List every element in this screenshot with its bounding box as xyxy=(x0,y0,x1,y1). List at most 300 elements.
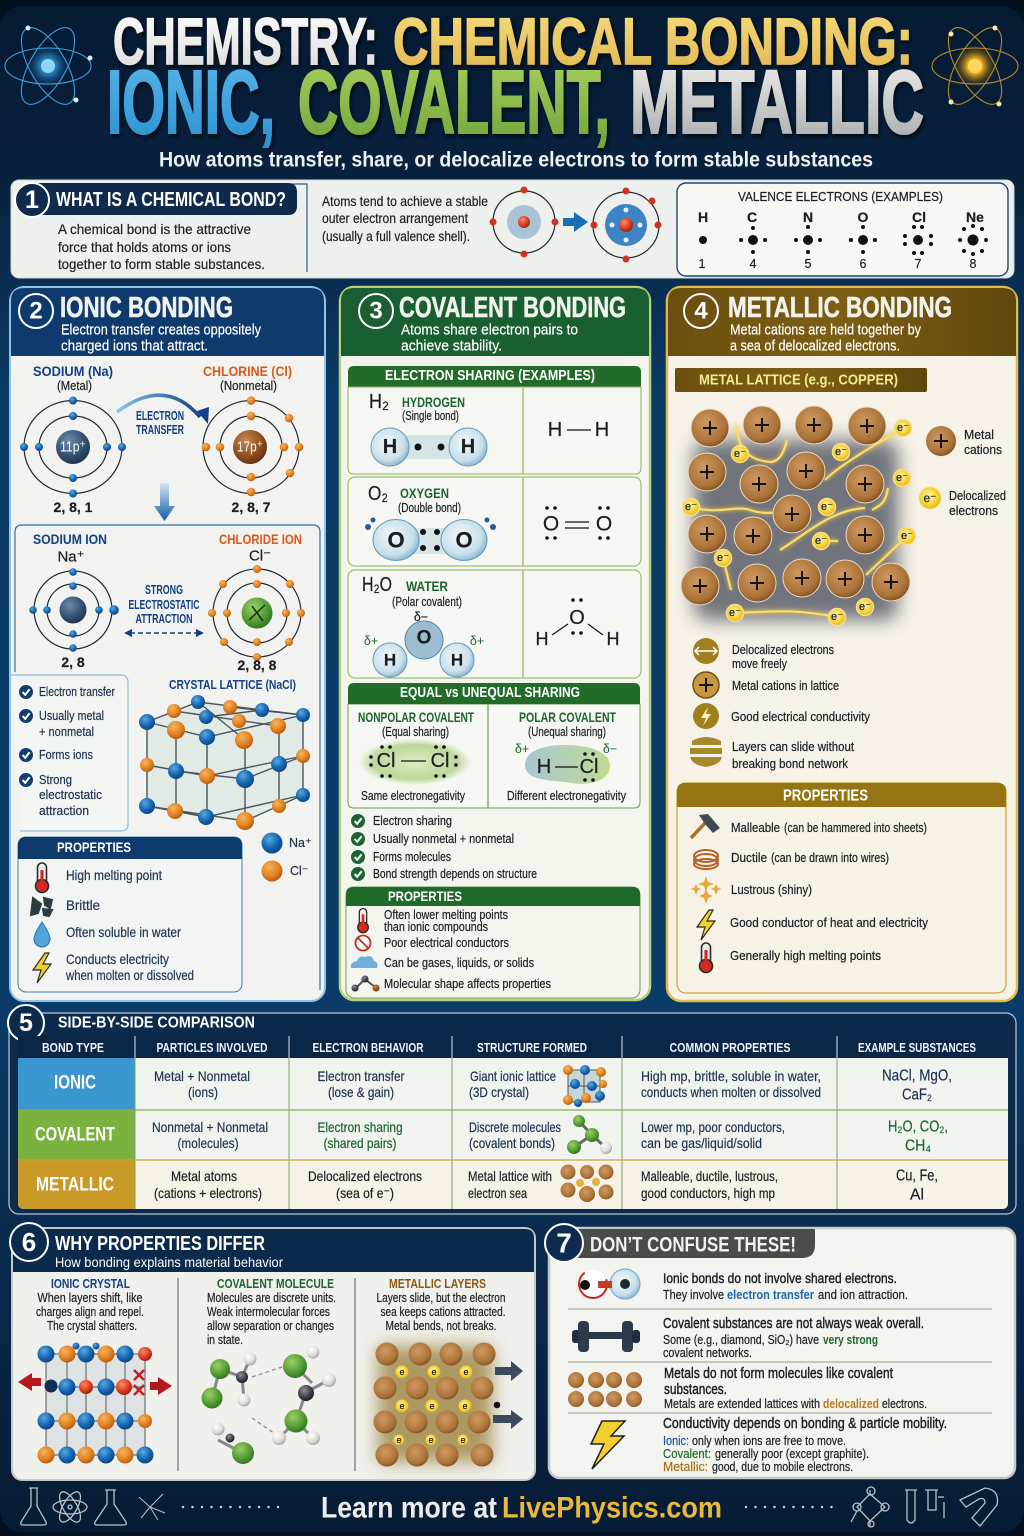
polar covalent: Different electronegativity xyxy=(507,789,627,803)
molecule: H2O: H xyxy=(384,650,396,670)
polar covalent: (Unequal sharing) xyxy=(528,725,606,739)
icon: conductivity xyxy=(693,703,719,729)
chlorine atom xyxy=(202,363,303,515)
item: metals: electrons. xyxy=(882,1397,927,1411)
table row: metallic: (sea of e⁻) xyxy=(336,1185,394,1201)
properties: covalent: Molecular shape affects properties xyxy=(384,977,551,991)
item: conductivity: Ionic: xyxy=(663,1434,689,1448)
column: metallic layers: METALLIC LAYERS xyxy=(389,1277,486,1291)
table header: STRUCTURE FORMED xyxy=(477,1041,587,1055)
header: why properties differ: How bonding explains material behavior xyxy=(55,1254,283,1270)
column: ionic crystal: When layers shift, like xyxy=(38,1291,143,1305)
checklist: ionic: Forms ions xyxy=(39,748,93,762)
item: covalent strength xyxy=(572,1316,924,1360)
item: conductivity: Metallic: xyxy=(663,1460,708,1474)
legend: metal cations xyxy=(926,426,1002,457)
polar covalent: H xyxy=(537,756,551,778)
row: water: WATER xyxy=(406,578,448,594)
checklist: ionic: Electron transfer xyxy=(39,685,115,699)
icon: wire coil xyxy=(694,850,718,869)
panel 6: why properties differ xyxy=(10,1223,535,1480)
legend: Na+ and Cl-: Cl⁻ xyxy=(290,864,308,878)
structure: O=O: O xyxy=(543,512,559,536)
chart: metal layers xyxy=(374,1342,523,1466)
table row: covalent: Nonmetal + Nonmetal xyxy=(152,1119,268,1135)
legend: Na+ and Cl-: Na⁺ xyxy=(289,836,312,850)
table header: PARTICLES INVOLVED xyxy=(156,1041,268,1055)
properties: ionic: Brittle xyxy=(66,897,100,913)
chart: crystal lattice xyxy=(139,678,310,830)
table row: metallic: Cu, Fe, xyxy=(896,1168,938,1184)
table header: BOND TYPE xyxy=(42,1041,104,1055)
list: metallic characteristics: breaking bond network xyxy=(732,757,849,771)
row: oxygen xyxy=(348,477,641,566)
text: stable arrangement: outer electron arrangement xyxy=(322,210,468,226)
molecule: H2 xyxy=(371,428,487,466)
icon: sparkles xyxy=(690,876,722,904)
properties: metallic xyxy=(677,783,1006,993)
column: covalent molecule: allow separation or changes xyxy=(207,1319,334,1333)
nonpolar covalent: (Equal sharing) xyxy=(382,725,449,739)
sodium ion: 2, 8 xyxy=(61,654,85,670)
icon: cation xyxy=(693,672,719,698)
table row: ionic: High mp, brittle, soluble in water, xyxy=(641,1068,821,1084)
checklist: ionic: + nonmetal xyxy=(39,725,94,739)
icon: atom before xyxy=(490,186,558,258)
panel: valence electrons: 5 xyxy=(805,257,812,271)
item: conductivity: only when ions are free to move. xyxy=(692,1434,846,1448)
polar covalent: δ− xyxy=(603,742,617,756)
panel: valence electrons: 4 xyxy=(750,257,757,271)
table row: metallic: good conductors, high mp xyxy=(641,1185,775,1201)
molecule: O2: O xyxy=(455,528,473,552)
header: ionic bonding: Electron transfer creates oppositely xyxy=(61,322,261,338)
properties: ionic: Conducts electricity xyxy=(66,951,169,967)
header: metallic bonding: Metal cations are held together by xyxy=(730,322,921,338)
icon: metal spheres xyxy=(568,1372,642,1407)
table row: ionic: NaCl, MgO, xyxy=(882,1068,952,1084)
text: bond definition: together to form stable substances. xyxy=(58,256,265,272)
column: ionic crystal: charges align and repel. xyxy=(36,1305,144,1319)
panel 1: what is a chemical bond xyxy=(11,180,1014,278)
header: covalent bonding: COVALENT BONDING xyxy=(399,292,626,324)
legend: metal cations: cations xyxy=(964,443,1002,457)
molecule: O2: O xyxy=(387,528,405,552)
heading: what is a chemical bond: WHAT IS A CHEMICAL BOND? xyxy=(56,189,286,211)
icon: thermometer xyxy=(700,943,712,972)
item: metals: Metals do not form molecules like covalent xyxy=(664,1366,893,1382)
title: COVALENT, xyxy=(298,53,610,153)
item: conductivity: generally poor (except graphite). xyxy=(715,1447,869,1461)
table row: metallic: (cations + electrons) xyxy=(154,1185,262,1201)
heading: don't confuse these xyxy=(545,1224,815,1262)
icon: hammer xyxy=(691,814,720,838)
chart: metal layers: e xyxy=(399,1401,405,1411)
equal vs unequal sharing xyxy=(348,683,640,808)
arrow: down xyxy=(154,483,175,521)
structure: H-H xyxy=(548,419,609,441)
text: bond definition: A chemical bond is the attractive xyxy=(58,221,251,237)
table row: covalent: (covalent bonds) xyxy=(469,1135,555,1151)
checklist: covalent: Electron sharing xyxy=(373,814,452,828)
chlorine atom: CHLORINE (Cl) xyxy=(203,363,292,379)
electrostatic attraction arrow: STRONG xyxy=(145,583,183,597)
chart: metal lattice xyxy=(681,406,916,626)
row: water: (Polar covalent) xyxy=(392,595,462,609)
properties: metallic: Generally high melting points xyxy=(730,949,881,963)
table row: covalent: (shared pairs) xyxy=(324,1135,396,1151)
legend: delocalized electrons: Delocalized xyxy=(949,489,1006,503)
molecule: H2: H xyxy=(383,436,397,458)
sodium ion xyxy=(29,531,119,670)
list: metallic characteristics: Delocalized electrons xyxy=(732,643,834,657)
header: ionic bonding: charged ions that attract. xyxy=(61,338,208,354)
table header: COMMON PROPERTIES xyxy=(670,1041,790,1055)
chart: metal lattice: e⁻ xyxy=(901,530,913,542)
text: bond definition: force that holds atoms or ions xyxy=(58,239,231,255)
properties: ionic xyxy=(18,837,242,992)
nonpolar covalent: NONPOLAR COVALENT xyxy=(358,709,474,725)
electrostatic attraction arrow: ELECTROSTATIC xyxy=(128,598,200,612)
chart: metal lattice: e⁻ xyxy=(729,607,741,619)
list: metallic characteristics: Layers can slide without xyxy=(732,740,854,754)
properties: metallic: Good conductor of heat and electricity xyxy=(730,916,929,930)
row: water: H₂O xyxy=(362,574,392,596)
column: metallic layers: sea keeps cations attracted. xyxy=(380,1305,506,1319)
list: metallic characteristics xyxy=(690,638,871,771)
structure: H2O xyxy=(536,598,620,649)
panel: valence electrons: H xyxy=(698,209,708,225)
item: conductivity: Conductivity depends on bonding & particle mobility. xyxy=(663,1416,947,1432)
chloride ion xyxy=(208,531,305,673)
header: covalent bonding xyxy=(341,288,649,356)
text: stable arrangement: (usually a full valence shell). xyxy=(322,228,470,244)
properties: ionic: PROPERTIES xyxy=(57,839,131,855)
checklist: ionic: electrostatic xyxy=(39,788,102,802)
chloride ion: CHLORIDE ION xyxy=(219,531,302,547)
panel 4: metallic bonding xyxy=(667,287,1017,1001)
panel: valence electrons: N xyxy=(803,209,813,225)
table row: ionic: conducts when molten or dissolved xyxy=(641,1084,821,1100)
chart: metal layers: e xyxy=(429,1401,435,1411)
polar covalent: Cl xyxy=(580,756,598,778)
column: covalent molecule: Weak intermolecular forces xyxy=(207,1305,330,1319)
item: ionic bonds: Ionic bonds do not involve shared electrons. xyxy=(663,1270,897,1286)
row: oxygen: (Double bond) xyxy=(398,501,461,515)
header: ionic bonding xyxy=(11,288,324,356)
item: covalent strength: Some (e.g., diamond, SiO₂) have xyxy=(663,1333,819,1347)
column: covalent molecule: COVALENT MOLECULE xyxy=(217,1277,334,1291)
table row: metallic: Metal atoms xyxy=(171,1168,237,1184)
structure: H2O: O xyxy=(569,607,585,629)
icon: atom after xyxy=(590,188,662,262)
structure: H-H: H xyxy=(548,419,562,441)
column: metallic layers: Layers slide, but the electron xyxy=(376,1291,506,1305)
chlorine atom: (Nonmetal) xyxy=(220,379,277,393)
heading: don't confuse these: DON’T CONFUSE THESE! xyxy=(590,1234,796,1256)
header: covalent bonding: 3 xyxy=(369,298,383,324)
legend: delocalized electrons: e⁻ xyxy=(923,491,937,505)
item: conductivity: good, due to mobile electrons. xyxy=(712,1460,853,1474)
molecule: H2O: δ+ xyxy=(470,634,484,648)
chart: metal lattice: e⁻ xyxy=(821,501,833,513)
electrostatic attraction arrow: ATTRACTION xyxy=(136,612,192,626)
icon: thermometer xyxy=(358,909,368,933)
list: metallic characteristics: move freely xyxy=(732,657,788,671)
item: covalent strength: covalent networks. xyxy=(663,1346,752,1360)
item: conductivity xyxy=(591,1416,947,1474)
table row: covalent: COVALENT xyxy=(35,1124,115,1146)
table header: EXAMPLE SUBSTANCES xyxy=(858,1041,976,1055)
properties: covalent: Often lower melting points xyxy=(384,908,508,922)
panel: valence electrons: 7 xyxy=(915,257,922,271)
header: covalent bonding: achieve stability. xyxy=(401,338,502,354)
nonpolar covalent xyxy=(358,709,474,803)
chlorine atom: 17p⁺ xyxy=(237,438,263,456)
item: metals xyxy=(568,1366,927,1411)
item: covalent strength: very strong xyxy=(823,1333,878,1347)
column: ionic crystal: The crystal shatters. xyxy=(47,1319,137,1333)
arrow: electron transfer: ELECTRON xyxy=(136,409,184,423)
properties: ionic: High melting point xyxy=(66,867,162,883)
footer: learn more xyxy=(321,1492,722,1524)
table row: ionic xyxy=(18,1058,1008,1110)
icon: layers xyxy=(690,737,722,767)
ion result box xyxy=(15,525,320,990)
title: IONIC, xyxy=(107,53,275,153)
sodium atom xyxy=(20,363,126,515)
icon: mini molecule xyxy=(567,1115,612,1154)
properties: metallic: Lustrous (shiny) xyxy=(731,883,812,897)
polar covalent: δ+ xyxy=(515,742,529,756)
chart: metal layers: e xyxy=(463,1367,469,1377)
sodium atom: 11p⁺ xyxy=(60,438,86,456)
header: ionic bonding: 2 xyxy=(29,298,43,324)
properties: metallic: (can be hammered into sheets) xyxy=(784,821,927,835)
column: covalent molecule xyxy=(202,1277,336,1464)
checklist: covalent: Usually nonmetal + nonmetal xyxy=(373,832,514,846)
table row: covalent: H₂O, CO₂, xyxy=(888,1118,948,1136)
metal lattice header: METAL LATTICE (e.g., COPPER) xyxy=(699,372,898,388)
panel 7: don't confuse these xyxy=(545,1224,1015,1478)
header: metallic bonding xyxy=(668,288,1016,356)
molecule: H2O: δ− xyxy=(414,610,428,624)
list: metallic characteristics: Good electrical conductivity xyxy=(731,710,871,724)
item: metals: Metals are extended lattices with xyxy=(664,1397,820,1411)
chart: metal lattice: e⁻ xyxy=(896,472,908,484)
text: bond definition xyxy=(58,221,265,272)
sodium ion: Na⁺ xyxy=(57,548,85,566)
icon: no conductivity xyxy=(356,936,370,950)
panel: valence electrons: 1 xyxy=(699,257,706,271)
properties: ionic: Often soluble in water xyxy=(66,924,181,940)
text: stable arrangement xyxy=(322,193,488,244)
row: water xyxy=(348,570,641,678)
chloride ion: Cl⁻ xyxy=(249,548,271,564)
chart: metal lattice: e⁻ xyxy=(717,552,729,564)
panel: valence electrons: 8 xyxy=(970,257,977,271)
chart: metal lattice: e⁻ xyxy=(831,611,843,623)
table row: covalent: Lower mp, poor conductors, xyxy=(641,1119,785,1135)
row: hydrogen: H₂ xyxy=(369,391,389,413)
heading: side-by-side comparison: 5 xyxy=(19,1009,33,1037)
checklist: ionic: attraction xyxy=(39,804,89,818)
panel: valence electrons: Ne xyxy=(966,209,984,225)
properties: covalent xyxy=(346,887,640,998)
column: metallic layers xyxy=(374,1277,523,1466)
table header xyxy=(18,1036,1008,1058)
legend: metal cations: Metal xyxy=(964,428,994,442)
column: metallic layers: Metal bends, not breaks. xyxy=(386,1319,496,1333)
nonpolar covalent: Cl xyxy=(377,750,395,772)
properties: metallic: Malleable xyxy=(731,821,780,835)
table header: ELECTRON BEHAVIOR xyxy=(312,1041,424,1055)
electron sharing header: ELECTRON SHARING (EXAMPLES) xyxy=(385,368,595,384)
chart: metal layers: e xyxy=(462,1401,468,1411)
heading: what is a chemical bond xyxy=(15,183,297,217)
checklist: ionic xyxy=(11,675,128,831)
icon: brittle shards xyxy=(31,898,52,916)
molecule: H2: H xyxy=(461,436,475,458)
title: CHEMISTRY: xyxy=(113,4,378,78)
chart: metal lattice: e⁻ xyxy=(835,446,847,458)
item: metals: delocalized xyxy=(823,1397,879,1411)
header: why properties differ: 6 xyxy=(22,1227,36,1257)
icon: moving electrons xyxy=(693,638,719,664)
polar covalent: POLAR COVALENT xyxy=(519,709,616,725)
sodium atom: (Metal) xyxy=(57,379,92,393)
list: metallic characteristics: Metal cations in lattice xyxy=(732,679,839,693)
table row: metallic: Malleable, ductile, lustrous, xyxy=(641,1168,778,1184)
panel 2: ionic bonding xyxy=(10,287,325,1001)
table row: covalent: (molecules) xyxy=(178,1135,238,1151)
column: ionic crystal xyxy=(18,1277,172,1464)
checklist: ionic: Usually metal xyxy=(39,709,104,723)
item: ionic bonds: and ion attraction. xyxy=(818,1288,908,1302)
panel: valence electrons: 6 xyxy=(860,257,867,271)
subtitle: How atoms transfer, share, or delocalize electrons to form stable substances xyxy=(159,148,873,172)
table row: ionic: Metal + Nonmetal xyxy=(154,1068,250,1084)
structure: H2O: H xyxy=(536,629,548,649)
checklist: covalent: Forms molecules xyxy=(373,850,451,864)
icon: dumbbell xyxy=(572,1321,640,1352)
icon: lightning bolt xyxy=(33,953,51,983)
checklist: ionic: Strong xyxy=(39,773,72,787)
header: covalent bonding: Atoms share electron pairs to xyxy=(401,322,578,338)
structure: H2O: H xyxy=(606,629,620,649)
chloride ion: 2, 8, 8 xyxy=(238,657,277,673)
item: ionic bonds: They involve xyxy=(663,1288,724,1302)
footer dots: left xyxy=(183,1506,287,1508)
molecule: H2O: H xyxy=(451,650,463,670)
panel: valence electrons xyxy=(677,183,1008,276)
structure: O=O xyxy=(543,506,612,540)
panel 3: covalent bonding xyxy=(340,287,650,1000)
icon: water drop xyxy=(34,922,50,947)
chart: crystal lattice: CRYSTAL LATTICE (NaCl) xyxy=(169,678,296,692)
table row: ionic: CaF₂ xyxy=(902,1086,932,1104)
icon: thermometer xyxy=(36,863,48,892)
molecule: H2O: O xyxy=(417,628,431,648)
properties: covalent: Can be gases, liquids, or solids xyxy=(384,956,534,970)
icon: ion pair xyxy=(575,1266,640,1302)
table row: ionic: Electron transfer xyxy=(318,1068,405,1084)
properties: covalent: Poor electrical conductors xyxy=(384,936,509,950)
properties: covalent: than ionic compounds xyxy=(384,920,488,934)
icon: clouds xyxy=(351,956,378,968)
footer: learn more: Learn more at xyxy=(321,1492,497,1524)
header: metallic bonding: METALLIC BONDING xyxy=(728,292,952,324)
header: why properties differ xyxy=(10,1223,534,1272)
icon: lightning bolt xyxy=(591,1421,625,1469)
table row: ionic: (ions) xyxy=(188,1084,218,1100)
icon: gold atom emblem xyxy=(932,20,1018,112)
molecule: H2O xyxy=(364,610,484,677)
row: oxygen: O₂ xyxy=(368,483,388,505)
molecule: H2O: δ+ xyxy=(364,634,378,648)
panel: valence electrons: O xyxy=(858,209,869,225)
item: conductivity: Covalent: xyxy=(663,1447,711,1461)
header: ionic bonding: IONIC BONDING xyxy=(60,292,233,324)
footer icons: right xyxy=(851,1487,998,1527)
title xyxy=(107,4,924,153)
molecules illustration xyxy=(202,1346,336,1464)
column: covalent molecule: Molecules are discrete units. xyxy=(207,1291,336,1305)
column: ionic crystal: IONIC CRYSTAL xyxy=(51,1277,130,1291)
sodium atom: 2, 8, 1 xyxy=(54,499,93,515)
item: ionic bonds xyxy=(575,1266,908,1302)
table row: ionic: IONIC xyxy=(54,1072,96,1094)
table row: covalent: Electron sharing xyxy=(318,1119,402,1135)
chart: metal layers: e xyxy=(460,1435,466,1445)
nonpolar covalent: Cl xyxy=(431,750,449,772)
table row: metallic xyxy=(18,1160,1008,1209)
equal vs unequal sharing: EQUAL vs UNEQUAL SHARING xyxy=(400,685,580,701)
table row: covalent: Discrete molecules xyxy=(469,1119,561,1135)
header: metallic bonding: 4 xyxy=(694,298,708,324)
icon: bolt xyxy=(697,910,715,940)
arrow: electron transfer xyxy=(117,395,209,437)
polar covalent xyxy=(507,709,627,803)
footer dots: right xyxy=(746,1506,840,1508)
properties: metallic: Ductile xyxy=(731,851,767,865)
footer: learn more: LivePhysics.com xyxy=(502,1492,722,1524)
heading: what is a chemical bond: 1 xyxy=(25,186,39,214)
panel: valence electrons: C xyxy=(747,209,757,225)
legend: delocalized electrons xyxy=(919,487,1006,518)
checklist: covalent xyxy=(351,814,537,881)
panel 5: side-by-side comparison xyxy=(8,1005,1016,1214)
row: hydrogen: HYDROGEN xyxy=(402,394,465,410)
arrow: electron transfer: TRANSFER xyxy=(136,423,184,437)
properties: metallic: PROPERTIES xyxy=(783,788,868,804)
icon: molecular shape xyxy=(352,976,380,992)
row: hydrogen: (Single bond) xyxy=(402,409,459,423)
table row: covalent: can be gas/liquid/solid xyxy=(641,1135,762,1151)
heading: don't confuse these: 7 xyxy=(556,1228,572,1258)
icon: mini ionic lattice xyxy=(563,1065,607,1107)
row: hydrogen xyxy=(348,387,641,474)
header: metallic bonding: a sea of delocalized electrons. xyxy=(730,338,900,354)
panel: valence electrons: VALENCE ELECTRONS (EXAMPLES) xyxy=(738,190,943,204)
legend: delocalized electrons: electrons xyxy=(949,504,998,518)
nonpolar covalent: Same electronegativity xyxy=(361,789,466,803)
chart: metal layers: e xyxy=(431,1367,437,1377)
properties: metallic: (can be drawn into wires) xyxy=(771,851,889,865)
chart: metal lattice: e⁻ xyxy=(685,501,697,513)
heading: side-by-side comparison xyxy=(8,1005,255,1041)
table row: covalent xyxy=(18,1110,1008,1160)
